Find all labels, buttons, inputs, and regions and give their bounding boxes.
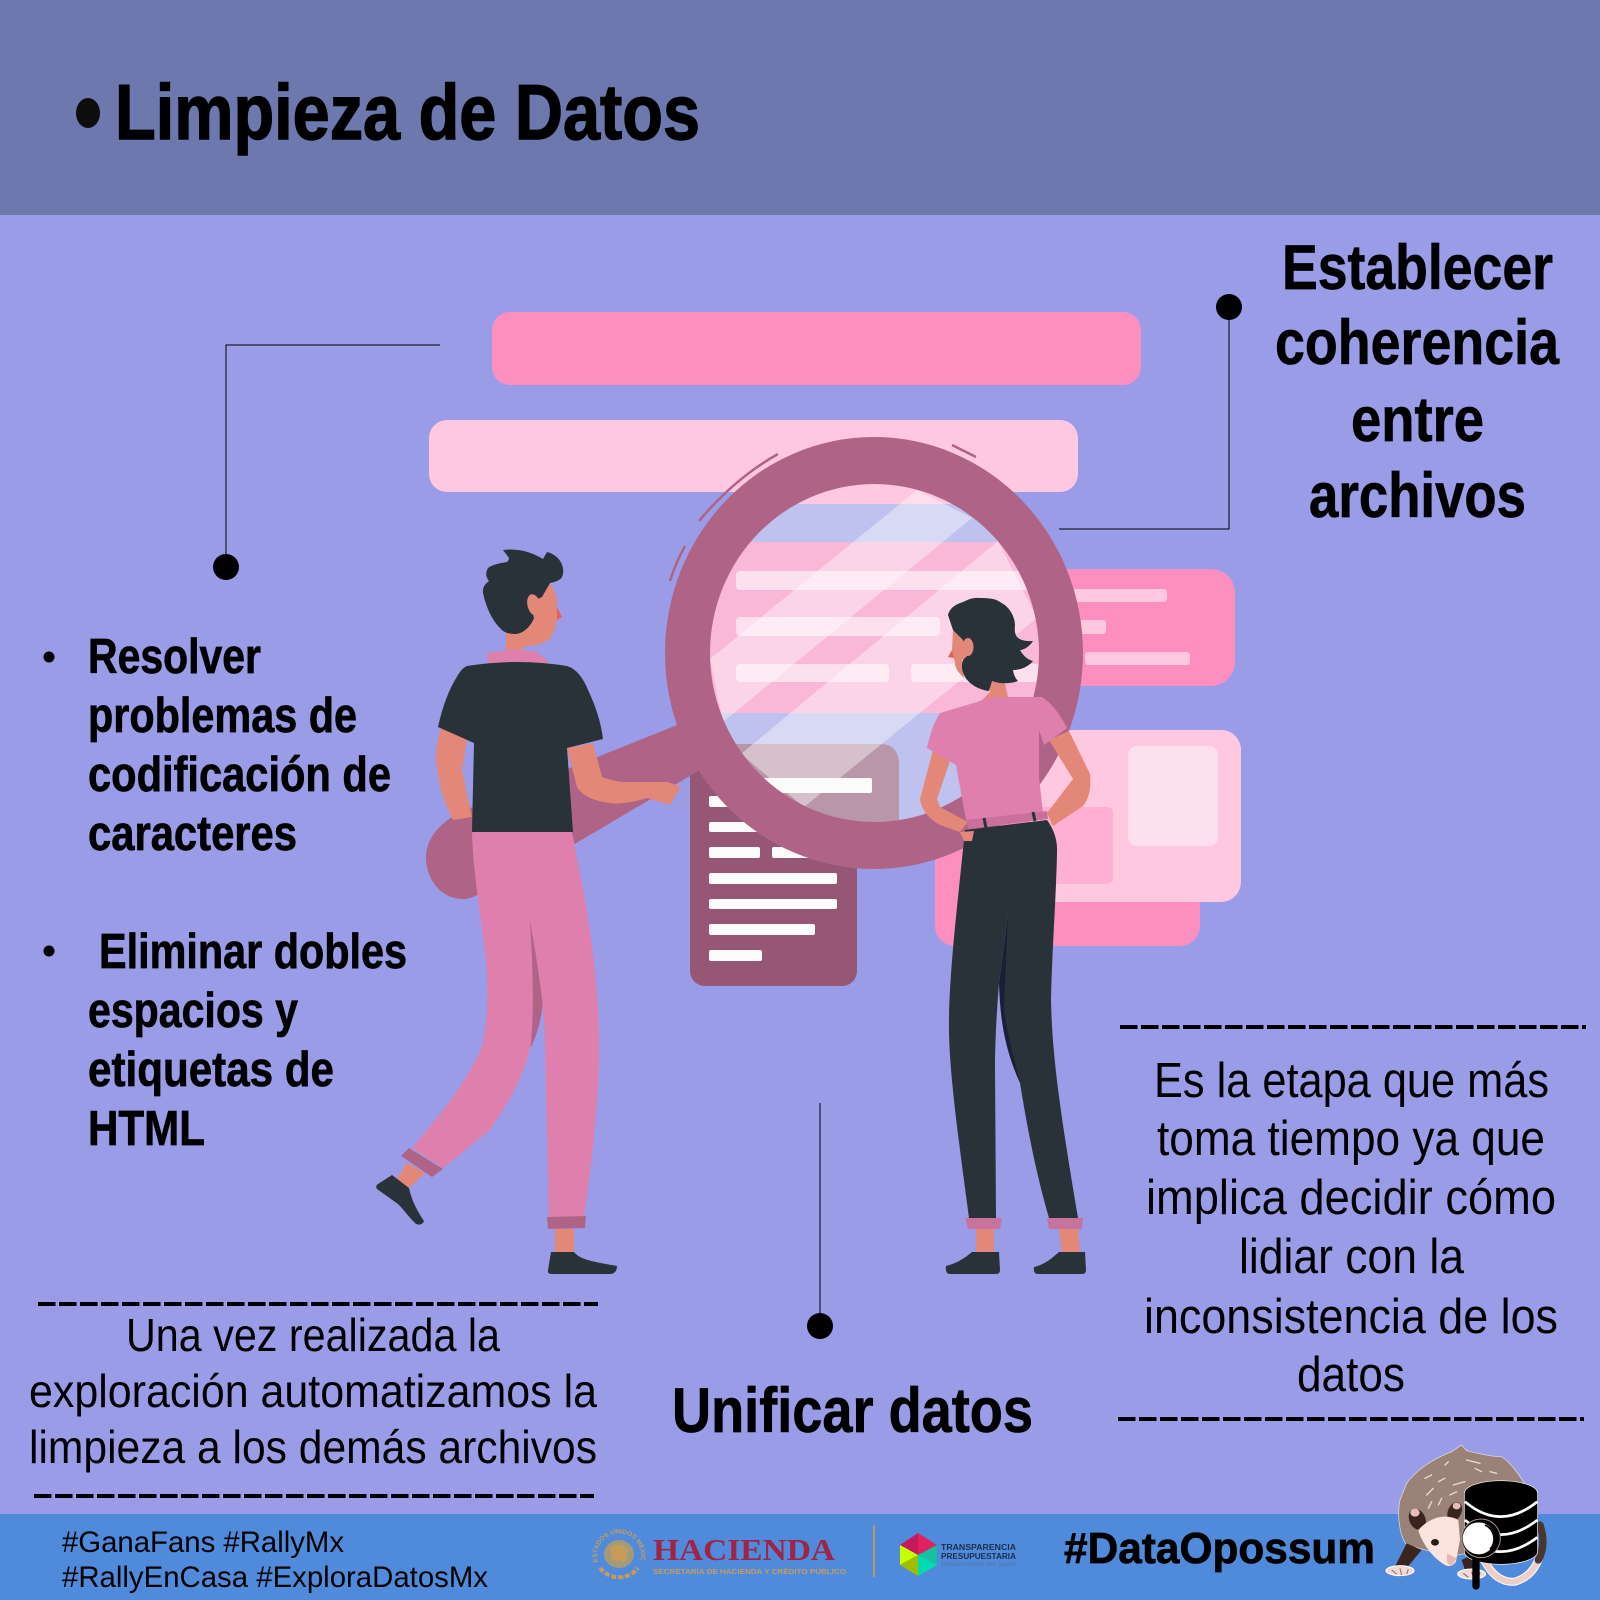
opossum ears	[1405, 1500, 1465, 1533]
man back leg foot	[394, 1163, 425, 1188]
second light pink bar	[429, 420, 1078, 492]
man neck and face	[506, 583, 557, 650]
text block: right note: implica decidir cómo	[1146, 1171, 1556, 1225]
list: cleaning tasks: codificación de	[88, 748, 391, 802]
text block: right note: datos	[1297, 1348, 1405, 1402]
list: cleaning tasks: caracteres	[88, 807, 297, 861]
heading: establecer coherencia entre archivos: Establecer	[1282, 233, 1553, 303]
woman shoes	[946, 1252, 1000, 1274]
list: cleaning tasks: espacios y	[88, 984, 298, 1038]
magnifier icon	[1462, 1519, 1500, 1586]
text block: right note: lidiar con la	[1239, 1230, 1465, 1284]
text block: right note	[1118, 1027, 1586, 1419]
illustration: people inspecting data with a magnifying glass	[376, 312, 1241, 1274]
logo: hacienda: HACIENDA	[653, 1532, 836, 1567]
hashtag: data opossum: #DataOpossum	[1064, 1524, 1375, 1573]
opossum eye and nose	[1431, 1539, 1457, 1566]
man pants	[412, 832, 599, 1217]
woman pants shade	[999, 913, 1020, 1083]
top pink bar	[492, 312, 1141, 385]
document	[690, 740, 857, 986]
text block: right note: toma tiempo ya que	[1157, 1112, 1545, 1166]
woman ankles	[976, 1229, 994, 1253]
heading: establecer coherencia entre archivos: entre	[1351, 385, 1484, 455]
logo: transparencia presupuestaria: Observatorio del gasto	[941, 1561, 1016, 1568]
man collar	[487, 649, 550, 663]
text block: right note: Es la etapa que más	[1154, 1054, 1549, 1108]
opossum head	[1418, 1517, 1460, 1566]
magnifier motion ticks	[670, 445, 976, 581]
opossum body	[1399, 1445, 1537, 1557]
text block: left note	[29, 1304, 598, 1496]
text block: left note: Una vez realizada la	[126, 1309, 500, 1361]
man figure	[376, 550, 681, 1274]
heading: establecer coherencia entre archivos	[1275, 233, 1560, 531]
woman cuffs	[965, 1218, 1002, 1229]
man ear	[525, 593, 543, 617]
list: cleaning tasks: etiquetas de	[88, 1043, 334, 1097]
logo: transparencia presupuestaria: TRANSPARENCIA	[941, 1543, 1016, 1552]
text block: left note: exploración automatizamos la	[29, 1365, 597, 1417]
man cuffs	[547, 1216, 586, 1229]
icon: opossum with database and magnifier	[1386, 1445, 1543, 1586]
list: cleaning tasks: Resolver	[88, 630, 261, 684]
hashtags: #RallyEnCasa #ExploraDatosMx	[62, 1561, 488, 1594]
list: cleaning tasks: problemas de	[88, 689, 357, 743]
list: cleaning tasks	[44, 630, 407, 1156]
opossum legs	[1395, 1543, 1422, 1570]
hashtags: #GanaFans #RallyMx	[62, 1526, 344, 1559]
magnifier ring	[665, 437, 1083, 869]
connector: establecer coherencia	[1059, 294, 1242, 529]
header band	[0, 0, 1600, 215]
woman face	[952, 630, 972, 678]
list: cleaning tasks: Eliminar dobles	[99, 925, 407, 979]
woman neck	[975, 675, 1014, 705]
logo: hacienda: SECRETARÍA DE HACIENDA Y CRÉDITO PÚBLICO	[653, 1567, 846, 1576]
opossum fur highlights	[1425, 1460, 1497, 1508]
logo: transparencia presupuestaria	[900, 1533, 1016, 1576]
heading: establecer coherencia entre archivos: archivos	[1309, 461, 1526, 531]
heading: establecer coherencia entre archivos: coherencia	[1275, 308, 1560, 378]
man shirt	[438, 662, 603, 832]
man front foot	[555, 1229, 574, 1253]
logo: hacienda	[592, 1525, 875, 1580]
magnifier lens view	[710, 490, 1039, 822]
text block: left note: limpieza a los demás archivos	[29, 1421, 597, 1473]
right pink card with lines	[1000, 569, 1235, 686]
logo: hacienda: ESTADOS UNIDOS MEXICANOS	[592, 1528, 646, 1563]
database icon	[1464, 1481, 1538, 1564]
woman pants	[949, 820, 1078, 1218]
man pants shade	[520, 920, 543, 1047]
woman arms	[920, 750, 974, 841]
connector: left list	[213, 345, 440, 580]
magnifier handle	[426, 725, 700, 899]
hashtags	[62, 1526, 488, 1594]
text block: right note: inconsistencia de los	[1144, 1290, 1558, 1344]
logo: transparencia presupuestaria: PRESUPUESTARIA	[941, 1552, 1016, 1561]
woman hair	[948, 598, 1033, 691]
connector: unificar datos	[807, 1103, 833, 1339]
opossum tail	[1485, 1525, 1543, 1582]
lower right stacked cards	[935, 730, 1241, 946]
man arms	[436, 728, 472, 820]
opossum paws	[1386, 1566, 1486, 1579]
woman shirt	[927, 697, 1067, 820]
woman belt	[966, 811, 1048, 829]
man hair	[483, 550, 563, 634]
list: cleaning tasks: HTML	[88, 1102, 205, 1156]
title: Limpieza de Datos	[115, 68, 700, 156]
woman figure	[920, 598, 1090, 1274]
woman ear	[962, 638, 974, 656]
heading: unificar datos: Unificar datos	[672, 1376, 1033, 1446]
